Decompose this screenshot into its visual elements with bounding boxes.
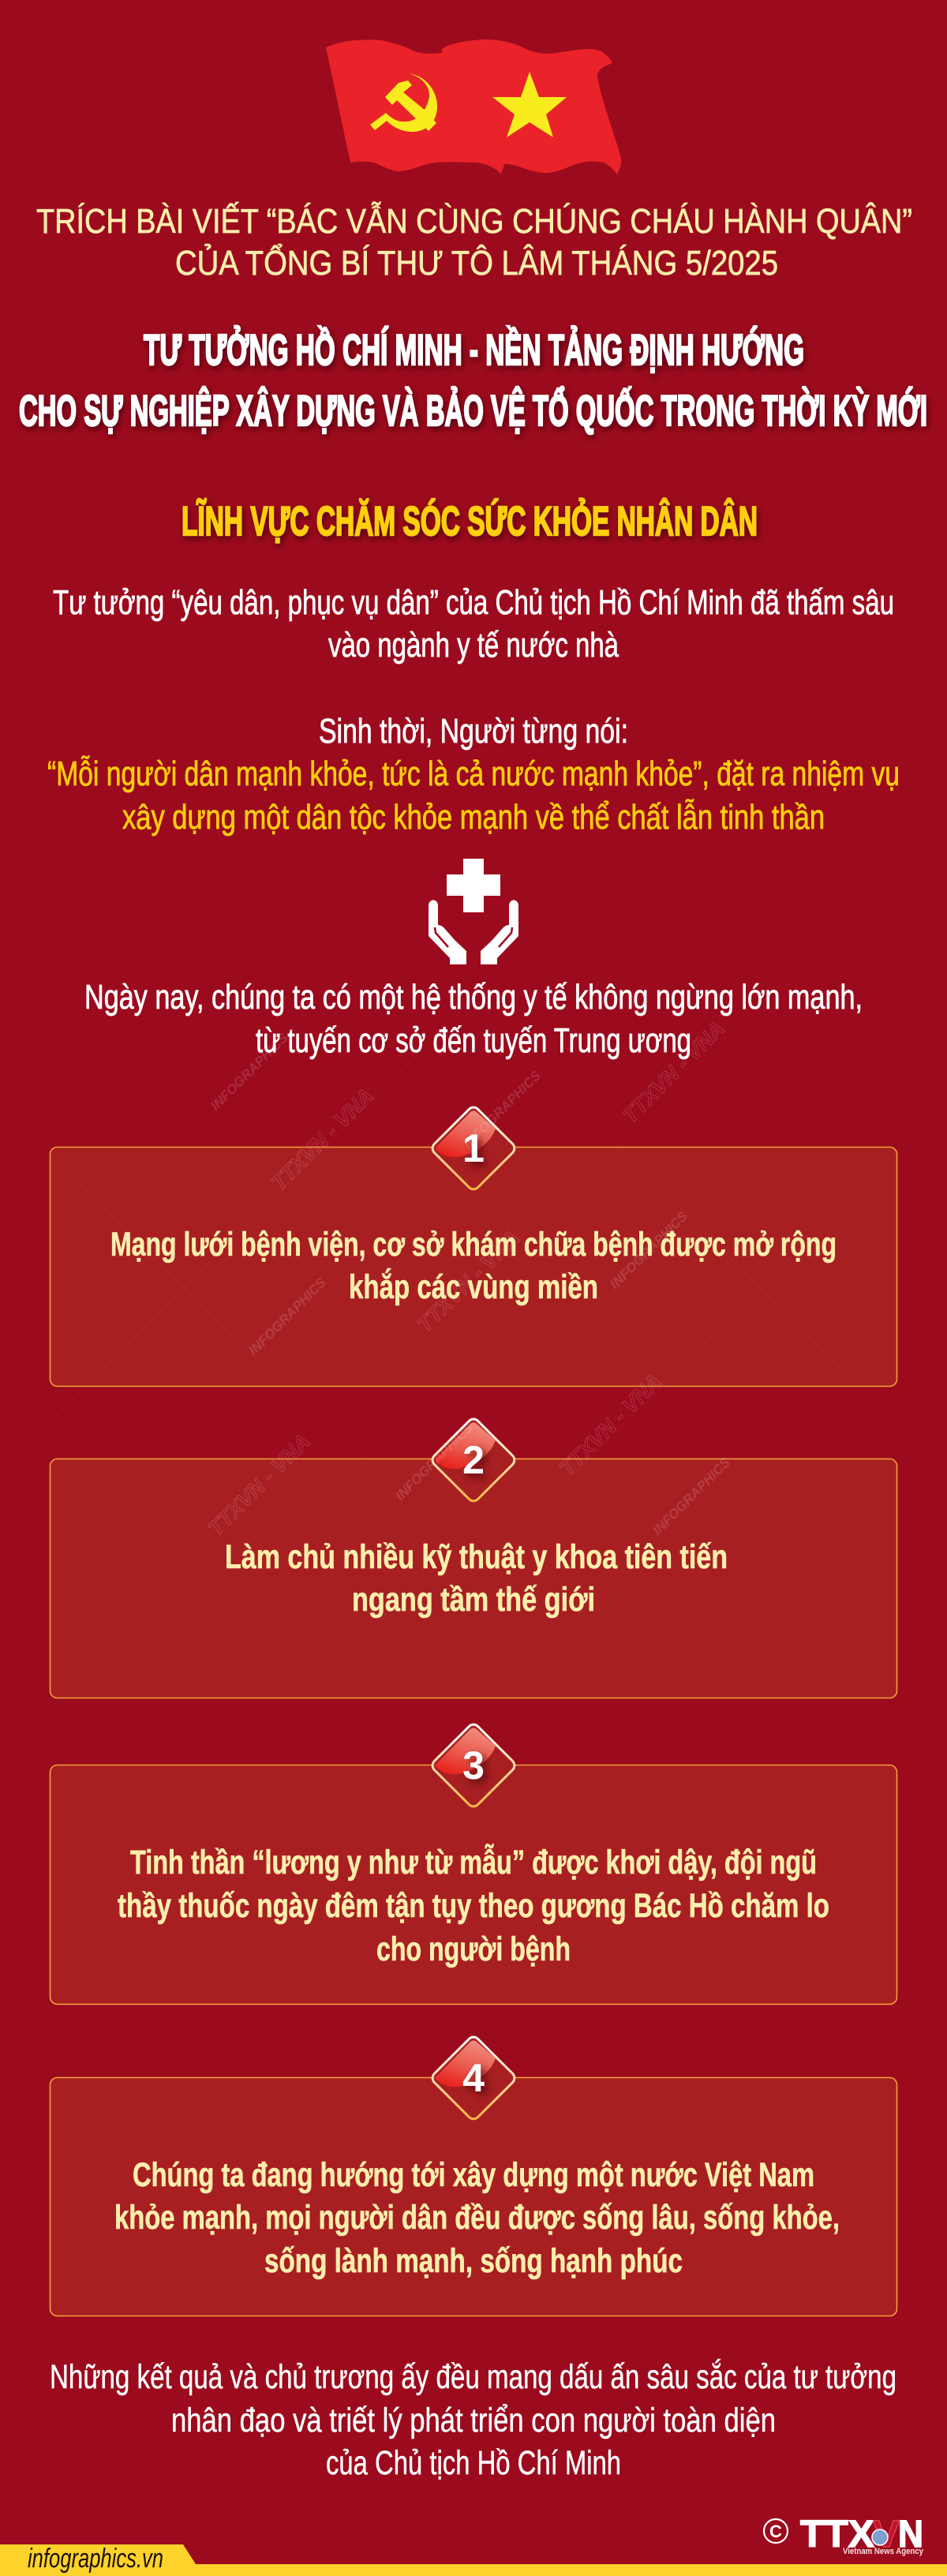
badge: number 2: 2 — [462, 1438, 485, 1482]
badge: number 3 — [430, 1722, 517, 1809]
watermarks: TTXVN - VNA — [267, 1084, 378, 1195]
logo: TTXVN: Vietnam News Agency — [843, 2547, 924, 2556]
watermarks: TTXVN - VNA — [204, 1429, 315, 1541]
watermarks: INFOGRAPHICS — [245, 1275, 329, 1358]
item 4 text: sống lành mạnh, sống hạnh phúc — [264, 2242, 683, 2280]
panel: item 2 box — [51, 1458, 896, 1698]
panel: item 4 box — [51, 2077, 896, 2316]
logo: TTXVN — [764, 2514, 924, 2556]
logo: TTXVN: TTX — [800, 2514, 874, 2555]
icon: yellow star — [492, 72, 567, 137]
intro text: Sinh thời, Người từng nói: — [319, 712, 628, 751]
quote text — [47, 754, 900, 837]
footer bar with source tab: infographics.vn — [28, 2544, 163, 2574]
badge: number 4 — [430, 2035, 517, 2121]
icon: hands holding medical cross — [429, 859, 518, 964]
logo: TTXVN: N — [898, 2514, 923, 2555]
item 3 text: cho người bệnh — [376, 1930, 571, 1968]
badge: number 2 — [430, 1417, 517, 1503]
icon: hammer and sickle — [370, 73, 437, 132]
intro text: vào ngành y tế nước nhà — [328, 626, 619, 665]
intro text — [53, 583, 894, 751]
logo: TTXVN: V — [873, 2514, 900, 2555]
watermarks: TTXVN - VNA — [618, 1017, 729, 1128]
watermarks: INFOGRAPHICS — [649, 1455, 733, 1538]
closing text: của Chủ tịch Hồ Chí Minh — [326, 2444, 621, 2482]
watermarks: INFOGRAPHICS — [208, 1030, 291, 1114]
main title — [19, 325, 927, 435]
icon: party flag — [326, 39, 621, 174]
closing text: nhân đạo và triết lý phát triển con người toàn diện — [171, 2402, 776, 2439]
watermarks — [47, 998, 900, 1574]
watermarks: TTXVN - VNA — [413, 1226, 524, 1337]
logo: TTXVN: C — [769, 2522, 782, 2541]
top heading — [36, 201, 912, 283]
panel: item 1 box — [51, 1148, 896, 1386]
panel: item 3 box — [51, 1765, 896, 2005]
item 3 text — [118, 1843, 829, 1968]
item 1 text — [110, 1226, 837, 1306]
badge: number 3: 3 — [462, 1743, 485, 1788]
badge: number 1 — [430, 1105, 517, 1192]
item 2 text — [225, 1538, 728, 1619]
item 2 text: Làm chủ nhiều kỹ thuật y khoa tiên tiến — [225, 1538, 728, 1576]
watermarks: TTXVN - VNA — [555, 1369, 666, 1481]
closing text — [50, 2358, 896, 2482]
watermarks: INFOGRAPHICS — [460, 1068, 544, 1151]
lead-in text: từ tuyến cơ sở đến tuyến Trung ương — [256, 1021, 691, 1060]
footer bar with source tab — [0, 2544, 947, 2576]
watermarks: INFOGRAPHICS — [392, 1420, 476, 1503]
top heading: CỦA TỔNG BÍ THƯ TÔ LÂM THÁNG 5/2025 — [175, 242, 778, 283]
item 4 text — [114, 2156, 840, 2280]
badge: number 4: 4 — [462, 2056, 485, 2100]
badge: number 1: 1 — [462, 1126, 485, 1170]
watermarks: INFOGRAPHICS — [607, 1208, 691, 1292]
item 2 text: ngang tầm thế giới — [352, 1581, 595, 1619]
item 1 text: khắp các vùng miền — [349, 1267, 598, 1306]
lead-in text — [84, 978, 863, 1060]
